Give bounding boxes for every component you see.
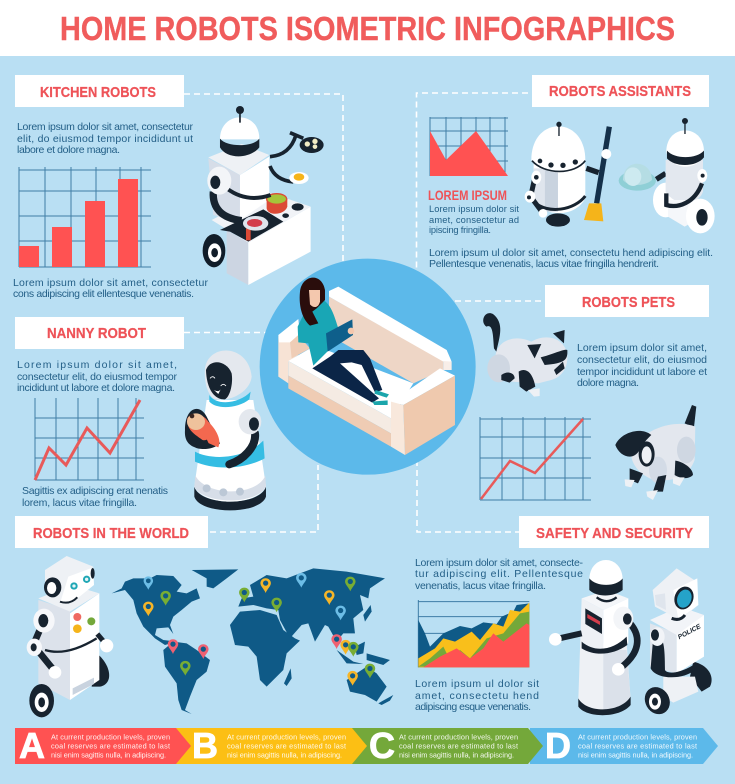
- text: pets: consectetur elit, do eiusmod: [577, 354, 707, 366]
- ribbon segment C: C: [369, 725, 395, 766]
- text: kitchen intro: elit, do eiusmod tempor incididunt ut: [17, 133, 193, 145]
- ribbon segment A: [15, 725, 191, 766]
- text: nanny note: [22, 485, 168, 509]
- text: nanny note: lorem, lacus vitae fringilla.: [22, 497, 137, 509]
- text: nanny intro: Lorem ipsum dolor sit amet,: [17, 359, 177, 371]
- text: lorem ipsum block: ipiscing fringilla.: [429, 225, 491, 235]
- heading: nanny robot: [15, 317, 184, 349]
- text: kitchen intro: Lorem ipsum dolor sit amet, consectetur: [17, 121, 194, 133]
- heading: robots in the world: ROBOTS IN THE WORLD: [33, 526, 189, 542]
- ribbon segment D: D: [545, 725, 571, 766]
- text: kitchen intro: labore et dolore magna.: [17, 144, 120, 156]
- ribbon segment B: B: [192, 725, 218, 766]
- text: lorem ipsum block: Lorem ipsum dolor sit: [429, 204, 519, 214]
- heading: robots pets: ROBOTS PETS: [582, 295, 675, 311]
- heading: safety and security: SAFETY AND SECURITY: [536, 526, 693, 542]
- text: assistants note: [429, 247, 713, 270]
- bar chart: [19, 167, 151, 267]
- title band: [0, 0, 735, 56]
- broom robot: [525, 122, 611, 227]
- police robot: POLICE: [677, 623, 703, 641]
- area chart: assistants: [430, 117, 508, 176]
- ribbon segment C: coal reserves are estimated to last: [399, 742, 518, 750]
- woman figure: [298, 278, 389, 405]
- text: nanny intro: consectetur elit, do eiusmod tempor: [17, 371, 178, 383]
- text: kitchen note: Lorem ipsum dolor sit amet, consectetur: [13, 277, 208, 289]
- ribbon segment C: At current production levels, proven: [399, 732, 518, 742]
- text: kitchen intro: [17, 121, 194, 156]
- text: lorem ipsum block: [428, 188, 519, 235]
- text: safety intro: venenatis, lacus vitae fringilla.: [415, 580, 546, 592]
- ribbon segment A: At current production levels, proven: [51, 732, 170, 742]
- heading: robots assistants: ROBOTS ASSISTANTS: [549, 84, 691, 100]
- heading: robots pets: [545, 285, 709, 317]
- line chart: pets: [480, 417, 591, 500]
- text: assistants note: Lorem ipsum ul dolor sit amet, consectetu hend adipiscing elit.: [429, 247, 713, 259]
- text: lorem ipsum block: LOREM IPSUM: [428, 188, 507, 203]
- nanny robot: [185, 351, 266, 510]
- ribbon segment C: [350, 725, 543, 766]
- world map: [112, 568, 393, 714]
- heading: kitchen robots: [15, 75, 184, 107]
- text: lorem ipsum block: amet, consectetur ad: [429, 215, 519, 225]
- ribbon segment D: coal reserves are estimated to last: [578, 742, 697, 750]
- ribbon segment A: nisi enim sagittis nulla, in adipiscing.: [51, 750, 166, 760]
- text: pets: dolore magna.: [577, 377, 639, 389]
- text: safety intro: Lorem ipsum dolor sit amet, consecte-: [415, 557, 584, 569]
- text: safety intro: [415, 557, 584, 592]
- police robot: [640, 568, 712, 719]
- ribbon segment D: [530, 725, 718, 766]
- security robot: [549, 560, 637, 715]
- text: assistants note: Pellentesque venenatis, lacus vitae fringilla hendrerit.: [429, 258, 659, 270]
- kitchen robot: [203, 106, 324, 285]
- text: safety note: amet, consectetu hend: [415, 690, 539, 702]
- line chart: nanny: [35, 398, 144, 480]
- ribbon segment C: nisi enim sagittis nulla, in adipiscing.: [399, 750, 514, 760]
- text: pets: tempor incididunt ut labore et: [577, 366, 707, 378]
- text: safety intro: tur adipiscing elit. Pellentesque: [415, 568, 583, 580]
- stacked area chart: [418, 600, 529, 667]
- tray robot: [619, 118, 715, 233]
- central circle with woman on sofa: [260, 259, 476, 475]
- text: nanny intro: incididunt ut labore et dolore magna.: [17, 382, 175, 394]
- ribbon segment D: nisi enim sagittis nulla, in adipiscing.: [578, 750, 693, 760]
- robot dog: [615, 405, 696, 500]
- map pins: [143, 573, 375, 686]
- heading: robots assistants: [532, 75, 709, 107]
- text: nanny note: Sagittis ex adipiscing erat nenatis: [22, 485, 168, 497]
- text: kitchen note: [13, 277, 208, 300]
- text: safety note: Lorem ipsum ul dolor sit: [415, 678, 539, 690]
- ribbon: [15, 725, 718, 766]
- heading: kitchen robots: KITCHEN ROBOTS: [40, 85, 156, 101]
- text: safety note: [415, 678, 539, 713]
- text: safety note: adipiscing esque venenatis.: [415, 701, 531, 713]
- heading: safety and security: [519, 516, 709, 548]
- ribbon segment B: At current production levels, proven: [227, 732, 346, 742]
- heading: robots in the world: [15, 516, 208, 548]
- ribbon segment A: A: [19, 725, 45, 766]
- ribbon segment B: nisi enim sagittis nulla, in adipiscing.: [227, 750, 342, 760]
- robot cat: [483, 313, 567, 397]
- heading: nanny robot: NANNY ROBOT: [47, 326, 146, 342]
- ribbon segment B: coal reserves are estimated to last: [227, 742, 346, 750]
- text: kitchen note: cons adipiscing elit ellentesque venenatis.: [13, 288, 194, 300]
- ribbon segment D: At current production levels, proven: [578, 732, 697, 742]
- ribbon segment A: coal reserves are estimated to last: [51, 742, 170, 750]
- text: pets: Lorem ipsum dolor sit amet,: [577, 342, 707, 354]
- text: pets: [577, 342, 707, 389]
- ribbon segment B: [170, 725, 367, 766]
- world robot: [27, 556, 113, 717]
- text: nanny intro: [17, 359, 178, 394]
